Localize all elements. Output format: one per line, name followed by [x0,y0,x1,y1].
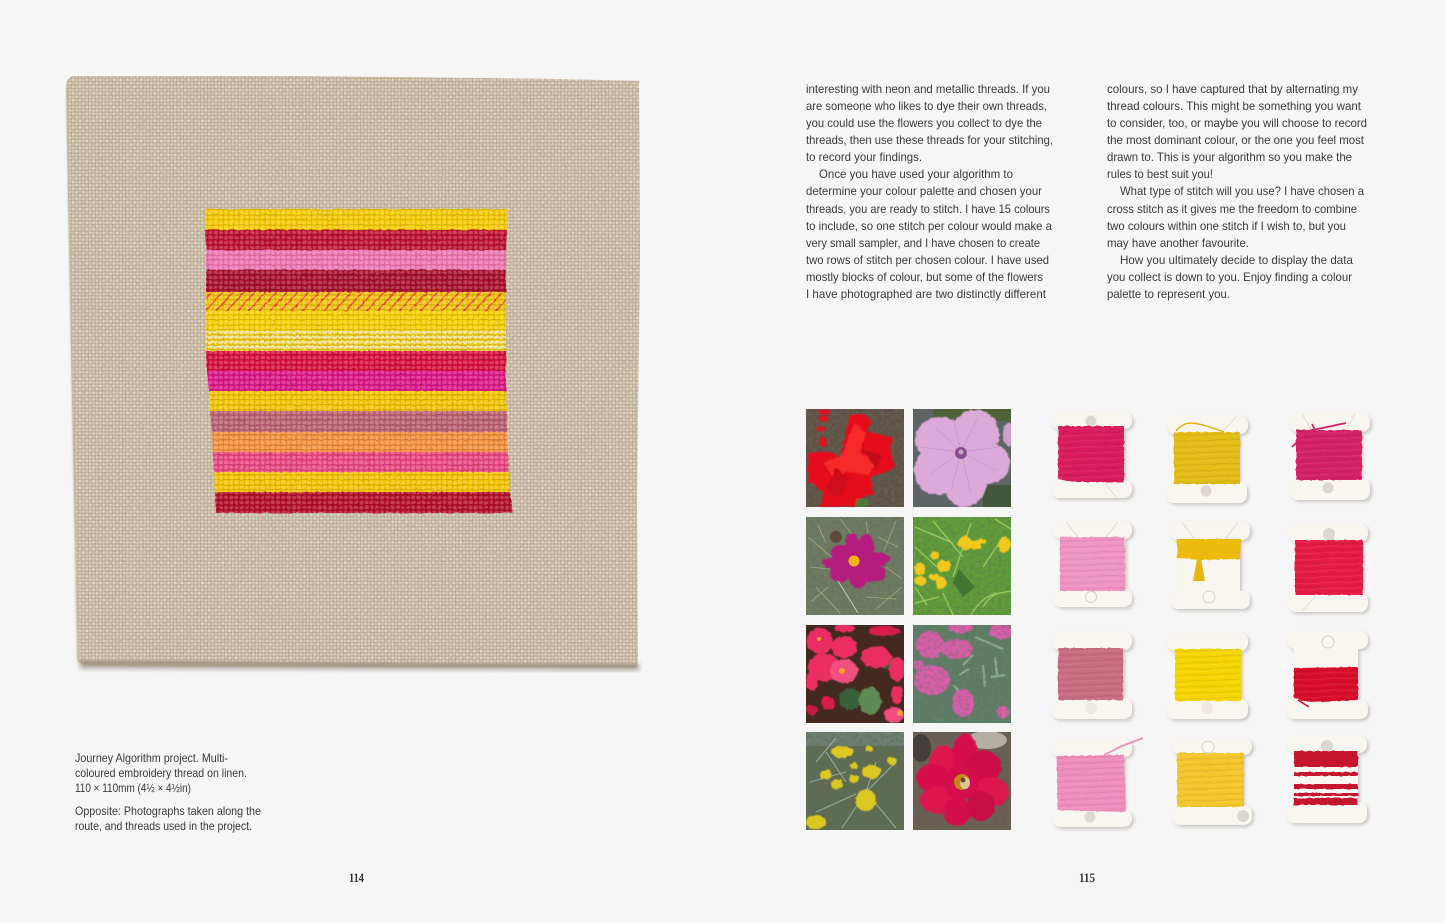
body text: left column: I have photographed are two distinctly different [806,287,1047,301]
photo: pink mallow [913,409,1011,507]
photo: embroidered linen sampler [60,70,650,675]
caption [75,751,261,833]
body text: right column [1107,82,1367,301]
thread card: dark red, sparse [1287,736,1367,823]
body text: left column: very small sampler, and I have chosen to create [806,236,1040,250]
thread card: light pink [1053,521,1132,607]
body text: left column [806,82,1053,301]
body text: left column: threads, you are ready to stitch. I have 15 colours [806,202,1050,216]
body text: left column: mostly blocks of colour, but some of the flowers [806,270,1043,284]
thread card: yellow with tassel [1170,521,1250,609]
thread card: magenta [1290,413,1370,500]
photo: yellow wildflowers [913,517,1011,615]
photo: red salvia [806,409,904,507]
thread card: bright yellow [1167,633,1248,719]
linen shadow [78,660,640,671]
body text: right column: to consider, too, or maybe you will choose to record [1107,116,1367,130]
body text: left column: Once you have used your algorithm to [819,167,1013,181]
body text: right column: you collect is down to you. Enjoy finding a colour [1107,270,1352,284]
body text: right column: colours, so I have captured that by alternating my [1107,82,1358,96]
thread card: mustard yellow [1166,416,1248,503]
body text: left column: you could use the flowers you collect to dye the [806,116,1042,130]
thread card: crimson pink [1051,412,1132,498]
photo: pink spirea [913,625,1011,723]
photo: crimson dahlia [913,732,1011,830]
caption: 110 × 110mm (4½ × 4½in) [75,781,191,795]
body text: right column: rules to best suit you! [1107,167,1213,181]
body text: right column: thread colours. This might be something you want [1107,99,1362,113]
photo: magenta cosmos [806,517,904,615]
body text: left column: threads, then use these threads for your stitching, [806,133,1053,147]
body text: right column: may have another favourite. [1107,236,1249,250]
body text: left column: are someone who likes to dye their own threads, [806,99,1047,113]
page number 115: 115 [1079,871,1095,885]
caption: coloured embroidery thread on linen. [75,766,247,780]
body text: right column: palette to represent you. [1107,287,1230,301]
thread card: pink with loose end [1052,738,1143,827]
linen fabric [60,70,650,675]
cross stitch stripes [205,209,513,513]
body text: left column: to record your findings. [806,150,922,164]
body text: left column: determine your colour palette and chosen your [806,184,1042,198]
photo grid: thread cards [1051,412,1370,827]
body text: left column: interesting with neon and metallic threads. If you [806,82,1050,96]
caption: route, and threads used in the project. [75,819,252,833]
photo: yellow fennel [806,732,904,830]
body text: right column: drawn to. This is your algorithm so you make the [1107,150,1352,164]
body text: left column: two rows of stitch per chosen colour. I have used [806,253,1049,267]
body text: right column: cross stitch as it gives me the freedom to combine [1107,202,1357,216]
photo grid: flowers [806,409,1015,830]
thread card: bright red [1288,524,1368,612]
photo: pink begonias [806,625,904,723]
page number 114: 114 [349,871,365,885]
thread card: red, half wound [1287,631,1368,719]
body text: right column: two colours within one stitch if I wish to, but you [1107,219,1346,233]
body text: left column: to include, so one stitch per colour would make a [806,219,1052,233]
body text: right column: How you ultimately decide to display the data [1120,253,1353,267]
body text: right column: What type of stitch will you use? I have chosen a [1120,184,1364,198]
caption: Journey Algorithm project. Multi- [75,751,228,765]
thread card: golden yellow [1172,738,1252,825]
caption: Opposite: Photographs taken along the [75,804,261,818]
thread card: dusty rose [1051,632,1132,719]
body text: right column: the most dominant colour, or the one you feel most [1107,133,1365,147]
